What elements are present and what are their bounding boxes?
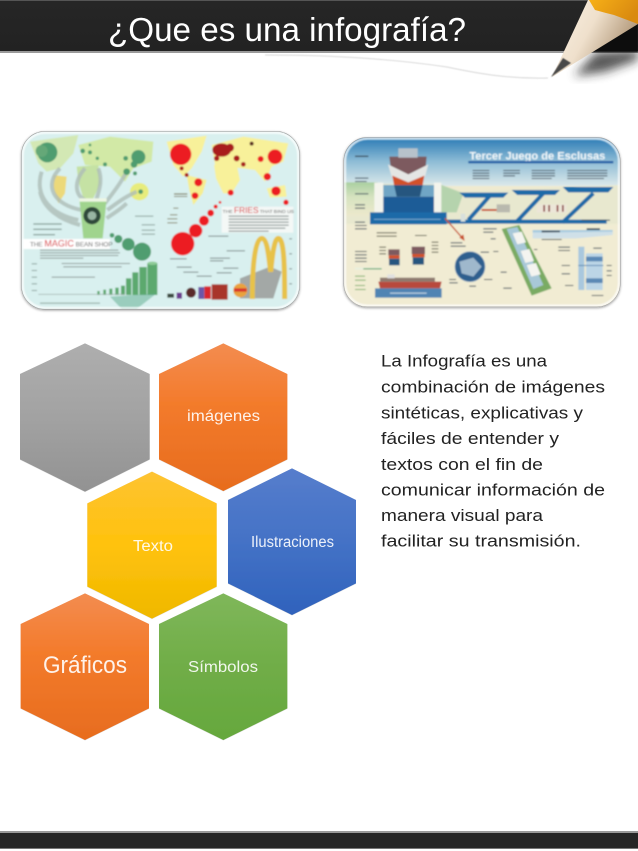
arrow bbox=[445, 218, 463, 238]
text block: definition: comunicar información de bbox=[381, 480, 605, 500]
circle bbox=[455, 252, 485, 282]
hexagon: gray bbox=[20, 343, 150, 492]
text block: definition: fáciles de entender y bbox=[381, 429, 560, 448]
text block: definition: facilitar su transmisión. bbox=[381, 532, 581, 550]
image: tercer juego de esclusas infographic bbox=[344, 138, 620, 307]
text block: definition: manera visual para bbox=[381, 506, 544, 525]
footer bar bbox=[0, 831, 638, 849]
right map bbox=[167, 136, 207, 177]
profile bbox=[533, 230, 613, 233]
logos bbox=[167, 283, 247, 300]
icon: pencil bbox=[551, 0, 638, 77]
hexagon: Ilustraciones bbox=[228, 468, 356, 615]
pencil line bbox=[265, 55, 548, 78]
label: Símbolos: Símbolos bbox=[188, 659, 258, 676]
column bbox=[578, 247, 584, 290]
notes bbox=[355, 156, 607, 262]
hexagon diagram bbox=[20, 343, 356, 740]
chain bbox=[171, 201, 221, 255]
left map bbox=[30, 135, 78, 172]
bubbles bbox=[110, 233, 151, 261]
hexagon: Texto bbox=[87, 472, 217, 619]
title: Tercer Juego de Esclusas bbox=[469, 150, 605, 162]
ship bbox=[389, 157, 427, 175]
text block: definition: La Infografía es una bbox=[381, 352, 548, 370]
label: Ilustraciones: Ilustraciones bbox=[251, 534, 334, 551]
title: ¿Que es una infografía? bbox=[108, 11, 466, 48]
channels bbox=[447, 193, 607, 222]
label: imágenes: imágenes bbox=[187, 408, 260, 425]
strip bbox=[502, 225, 552, 296]
text block: definition: combinación de imágenes bbox=[381, 378, 605, 396]
hexagon: imágenes bbox=[159, 343, 287, 491]
title band bbox=[23, 239, 110, 249]
fries band bbox=[222, 207, 293, 233]
label: Gráficos: Gráficos bbox=[43, 652, 127, 679]
bars bbox=[97, 263, 157, 295]
image: magic bean shop and fries infographic bbox=[22, 132, 299, 309]
lock bbox=[374, 183, 383, 214]
hexagon: Gráficos bbox=[21, 593, 149, 740]
label: Texto: Texto bbox=[133, 538, 173, 555]
small ships bbox=[388, 249, 400, 255]
text block: definition bbox=[381, 352, 605, 550]
image: magic bean shop and fries infographic: THE MAGIC BEAN SHOP bbox=[30, 239, 113, 249]
hexagon: Símbolos bbox=[159, 593, 287, 740]
cup bbox=[79, 199, 107, 238]
text block: definition: sintéticas, explicativas y bbox=[381, 404, 584, 422]
large ship bbox=[378, 282, 442, 288]
image: magic bean shop and fries infographic: THE FRIES THAT BIND US bbox=[223, 205, 295, 215]
legend lines bbox=[33, 216, 155, 235]
arches bbox=[240, 267, 282, 298]
text block: definition: textos con el fin de bbox=[381, 455, 543, 474]
header bar bbox=[0, 0, 638, 53]
